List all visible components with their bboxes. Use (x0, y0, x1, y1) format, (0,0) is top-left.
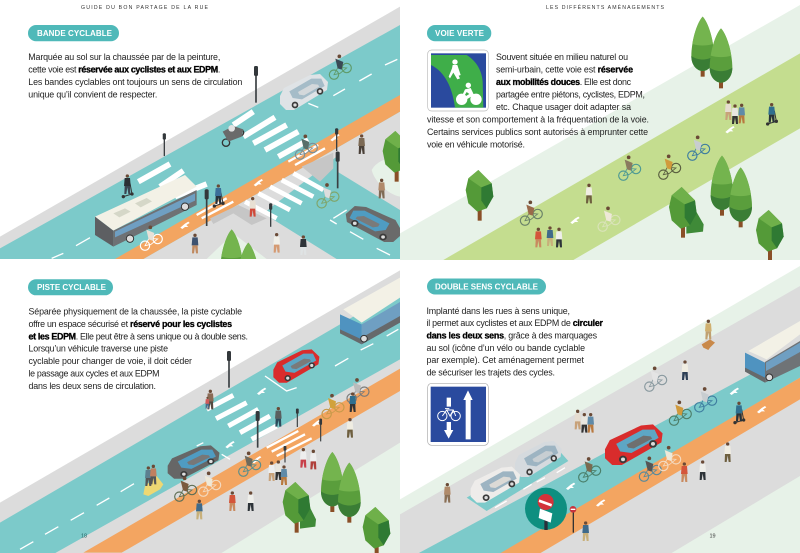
text block: double sens cyclable (426, 306, 604, 378)
heading: piste cyclable: PISTE CYCLABLE (37, 283, 107, 292)
trees (466, 17, 784, 261)
text block: voie verte: Souvent située en milieu naturel ou (496, 52, 628, 62)
illustration: contraflow cycle lane (400, 266, 800, 553)
small no-entry sign (570, 506, 576, 533)
heading: bande cyclable (28, 25, 119, 41)
trees (221, 131, 400, 259)
running header: GUIDE DU BON PARTAGE DE LA RUE (81, 5, 209, 11)
bus (95, 175, 197, 247)
text block: voie verte: Certains services publics sont autorisés à emprunter cette (427, 127, 648, 137)
pedestrians (196, 390, 356, 519)
walkers and riders (520, 100, 778, 247)
text block: bande cyclable (28, 52, 242, 100)
text block: double sens cyclable: dans les deux sens, grâce à des marquages (426, 330, 598, 340)
heading: double sens cyclable (427, 278, 546, 294)
bus (340, 278, 400, 344)
text block: bande cyclable: Les bandes cyclables ont toujours un sens de circulation (28, 77, 242, 87)
text block: voie verte: voie en véhicule motorisé. (427, 140, 525, 150)
text block: piste cyclable: et les EDPM. Elle peut être à sens unique ou à double sens. (28, 332, 248, 342)
ground marks (225, 388, 321, 463)
bus (745, 321, 800, 383)
cycle marks (180, 134, 340, 229)
text block: piste cyclable: le passage aux cycles et aux EDPM (28, 368, 160, 378)
heading: double sens cyclable: DOUBLE SENS CYCLABLE (435, 282, 539, 292)
text block: voie verte: aux mobilités douces. Elle est donc (496, 77, 632, 87)
text block: bande cyclable: cette voie est réservée aux cyclistes et aux EDPM. (28, 64, 220, 74)
pedestrians (444, 320, 745, 541)
sign: double sens cyclable (428, 383, 488, 445)
grey car (168, 445, 220, 479)
page number 19: 19 (710, 534, 716, 540)
text block: voie verte: semi-urbain, cette voie est réservée (496, 64, 633, 74)
text block: bande cyclable: unique qu’il convient de respecter. (28, 90, 157, 100)
trees (283, 452, 390, 553)
white car (280, 74, 328, 110)
text block: piste cyclable: offre un espace sécurisé et réservé pour les cyclistes (28, 319, 232, 329)
illustration: separated cycle track (0, 270, 400, 553)
text block: voie verte (427, 52, 649, 150)
grey-blue car (346, 206, 400, 242)
text block: piste cyclable (28, 306, 248, 391)
scooter rider and motorbike (122, 125, 244, 198)
illustration: greenway (400, 5, 800, 263)
text block: piste cyclable: Séparée physiquement de la chaussée, la piste cyclable (28, 306, 242, 316)
text block: voie verte: partagée entre piétons, cyclistes, EDPM, (496, 90, 645, 100)
text block: double sens cyclable: de sécuriser les trajets des cycles. (426, 368, 555, 378)
cyclists (579, 366, 717, 482)
red car (605, 424, 663, 465)
text block: piste cyclable: cyclable pour changer de voie, il doit céder (28, 356, 192, 366)
red car (273, 349, 319, 383)
traffic lights (163, 66, 340, 227)
heading: bande cyclable: BANDE CYCLABLE (37, 29, 113, 38)
text block: double sens cyclable: Implanté dans les rues à sens unique, (426, 306, 570, 316)
text block: voie verte: vitesse et son comportement à la fréquentation de la voie. (427, 114, 649, 124)
text block: piste cyclable: Lorsqu’un véhicule traverse une piste (28, 344, 168, 354)
text block: bande cyclable: Marquée au sol sur la chaussée par de la peinture, (28, 52, 220, 62)
text block: double sens cyclable: il permet aux cyclistes et aux EDPM de circuler (426, 318, 604, 328)
heading: voie verte (427, 25, 491, 41)
illustration: intersection with painted cycle lane (0, 6, 400, 259)
pedestrians (192, 134, 385, 255)
ground marks (570, 126, 735, 224)
panel: voie verte (400, 4, 800, 263)
heading: voie verte: VOIE VERTE (435, 29, 485, 38)
traffic lights (227, 351, 322, 462)
text block: double sens cyclable: au sol (icône d’un vélo ou bande cyclable (426, 343, 585, 353)
page number 18: 18 (81, 534, 87, 540)
parked cars (471, 441, 562, 503)
panel: double sens cyclable (400, 266, 800, 553)
text block: double sens cyclable: par exemple). Cet aménagement permet (426, 355, 585, 365)
no-entry sign inset (525, 488, 567, 530)
running header: LES DIFFÉRENTS AMÉNAGEMENTS (546, 4, 665, 11)
ground marks (566, 388, 766, 507)
sign: voie verte (428, 50, 488, 111)
cyclists (140, 54, 351, 250)
heading: piste cyclable (28, 279, 113, 295)
cyclists (175, 378, 369, 501)
scooter (143, 465, 163, 496)
text block: piste cyclable: dans les deux sens de circulation. (28, 381, 156, 391)
text block: voie verte: etc. Chaque usager doit adapter sa (496, 102, 631, 112)
panel: bande cyclable (0, 5, 400, 259)
panel: piste cyclable (0, 270, 400, 553)
